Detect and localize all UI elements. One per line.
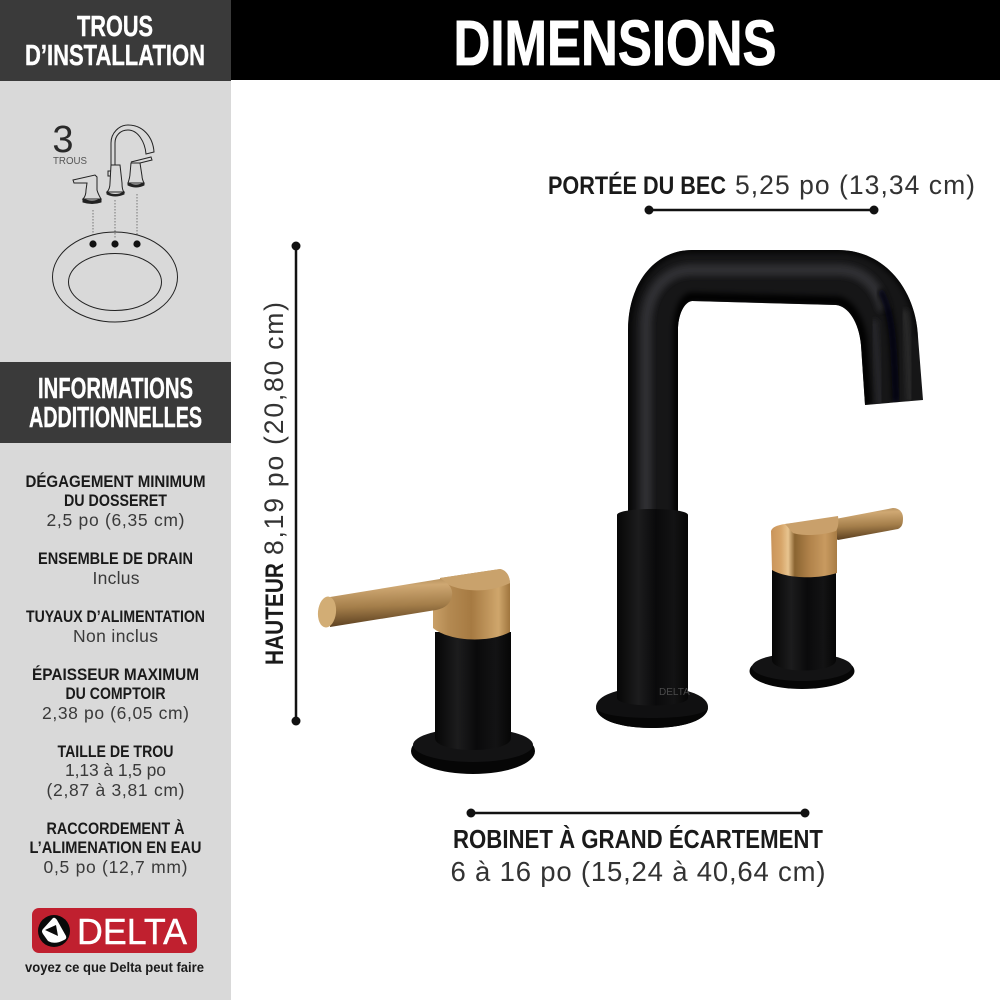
icon: outline faucet xyxy=(73,125,154,204)
heading: trous d'installation xyxy=(0,0,231,81)
panel: left sidebar xyxy=(0,81,231,1000)
gold collar xyxy=(771,518,837,577)
spec: taille de trou xyxy=(46,743,184,800)
lever xyxy=(830,508,903,540)
logo: delta xyxy=(32,908,197,953)
heading: trous d'installation: TROUS xyxy=(77,11,153,43)
label: 3 trous: 3 xyxy=(52,119,74,161)
base plate xyxy=(411,728,535,774)
gold collar xyxy=(433,569,510,639)
spec: tuyaux d'alimentation: Non inclus xyxy=(73,626,158,646)
dimension: reach line xyxy=(644,206,878,214)
spec: tuyaux d'alimentation xyxy=(26,608,205,646)
faucet: left handle xyxy=(316,569,535,774)
dimension: height label: HAUTEUR xyxy=(261,563,289,665)
dimension: reach label xyxy=(548,170,975,200)
spec: épaisseur maximum: ÉPAISSEUR MAXIMUM xyxy=(32,665,199,684)
heading: dimensions banner: DIMENSIONS xyxy=(454,7,776,79)
faucet: right handle xyxy=(750,508,903,689)
spec: taille de trou: (2,87 à 3,81 cm) xyxy=(46,780,184,800)
base plate xyxy=(596,687,708,728)
label: 3 trous xyxy=(52,119,87,167)
spec: ensemble de drain: Inclus xyxy=(92,568,140,588)
spec: taille de trou: TAILLE DE TROU xyxy=(58,743,174,761)
spec: tuyaux d'alimentation: TUYAUX D’ALIMENTATION xyxy=(26,608,205,626)
icon: three holes xyxy=(89,240,141,248)
spec: ensemble de drain: ENSEMBLE DE DRAIN xyxy=(38,550,193,568)
heading: dimensions banner xyxy=(231,0,1000,80)
faucet: centre spout xyxy=(596,245,930,728)
heading: trous d'installation: D’INSTALLATION xyxy=(25,40,205,72)
dimension: height label xyxy=(259,302,289,665)
spec: ensemble de drain xyxy=(38,550,193,588)
spec: raccordement: L’ALIMENATION EN EAU xyxy=(30,839,202,857)
dimension: height line xyxy=(292,242,300,726)
dimension: reach label: 5,25 po (13,34 cm) xyxy=(735,170,975,200)
spec: dégagement minimum: 2,5 po (6,35 cm) xyxy=(46,510,184,530)
spec: épaisseur maximum: DU COMPTOIR xyxy=(66,685,166,703)
spec: raccordement xyxy=(30,819,202,877)
body xyxy=(435,632,511,750)
base plate xyxy=(750,653,854,689)
dimension: width label xyxy=(450,824,826,887)
spec list xyxy=(26,472,206,877)
dimension: width label: ROBINET À GRAND ÉCARTEMENT xyxy=(453,824,823,854)
dotted connectors xyxy=(93,194,137,238)
heading: informations additionnelles xyxy=(0,362,231,443)
dimension: height label: 8,19 po (20,80 cm) xyxy=(259,302,289,555)
spec: dégagement minimum: DÉGAGEMENT MINIMUM xyxy=(26,472,206,491)
dimension: width label: 6 à 16 po (15,24 à 40,64 cm) xyxy=(450,856,826,887)
spec: dégagement minimum: DU DOSSERET xyxy=(64,492,167,510)
logo: delta: DELTA xyxy=(77,911,187,952)
spec: raccordement: 0,5 po (12,7 mm) xyxy=(44,857,188,877)
dimension: reach label: PORTÉE DU BEC xyxy=(548,171,726,200)
engraved brand: DELTA xyxy=(659,687,690,698)
dimension: width line xyxy=(466,808,810,818)
spout body xyxy=(617,509,688,706)
body xyxy=(772,570,836,670)
icon: sink basin xyxy=(52,232,178,322)
tagline: voyez ce que Delta peut faire xyxy=(25,959,204,975)
spec: dégagement minimum xyxy=(26,472,206,530)
heading: informations additionnelles: INFORMATIONS xyxy=(38,373,193,405)
lever xyxy=(330,579,452,627)
spec: épaisseur maximum xyxy=(32,665,199,723)
heading: informations additionnelles: ADDITIONNELLES xyxy=(29,402,202,434)
spout tube xyxy=(628,250,923,511)
spec: épaisseur maximum: 2,38 po (6,05 cm) xyxy=(42,703,189,723)
spec: taille de trou: 1,13 à 1,5 po xyxy=(65,760,166,780)
label: 3 trous: TROUS xyxy=(53,156,87,167)
spec: raccordement: RACCORDEMENT À xyxy=(46,819,185,838)
diagram: three-hole installation xyxy=(52,119,178,322)
